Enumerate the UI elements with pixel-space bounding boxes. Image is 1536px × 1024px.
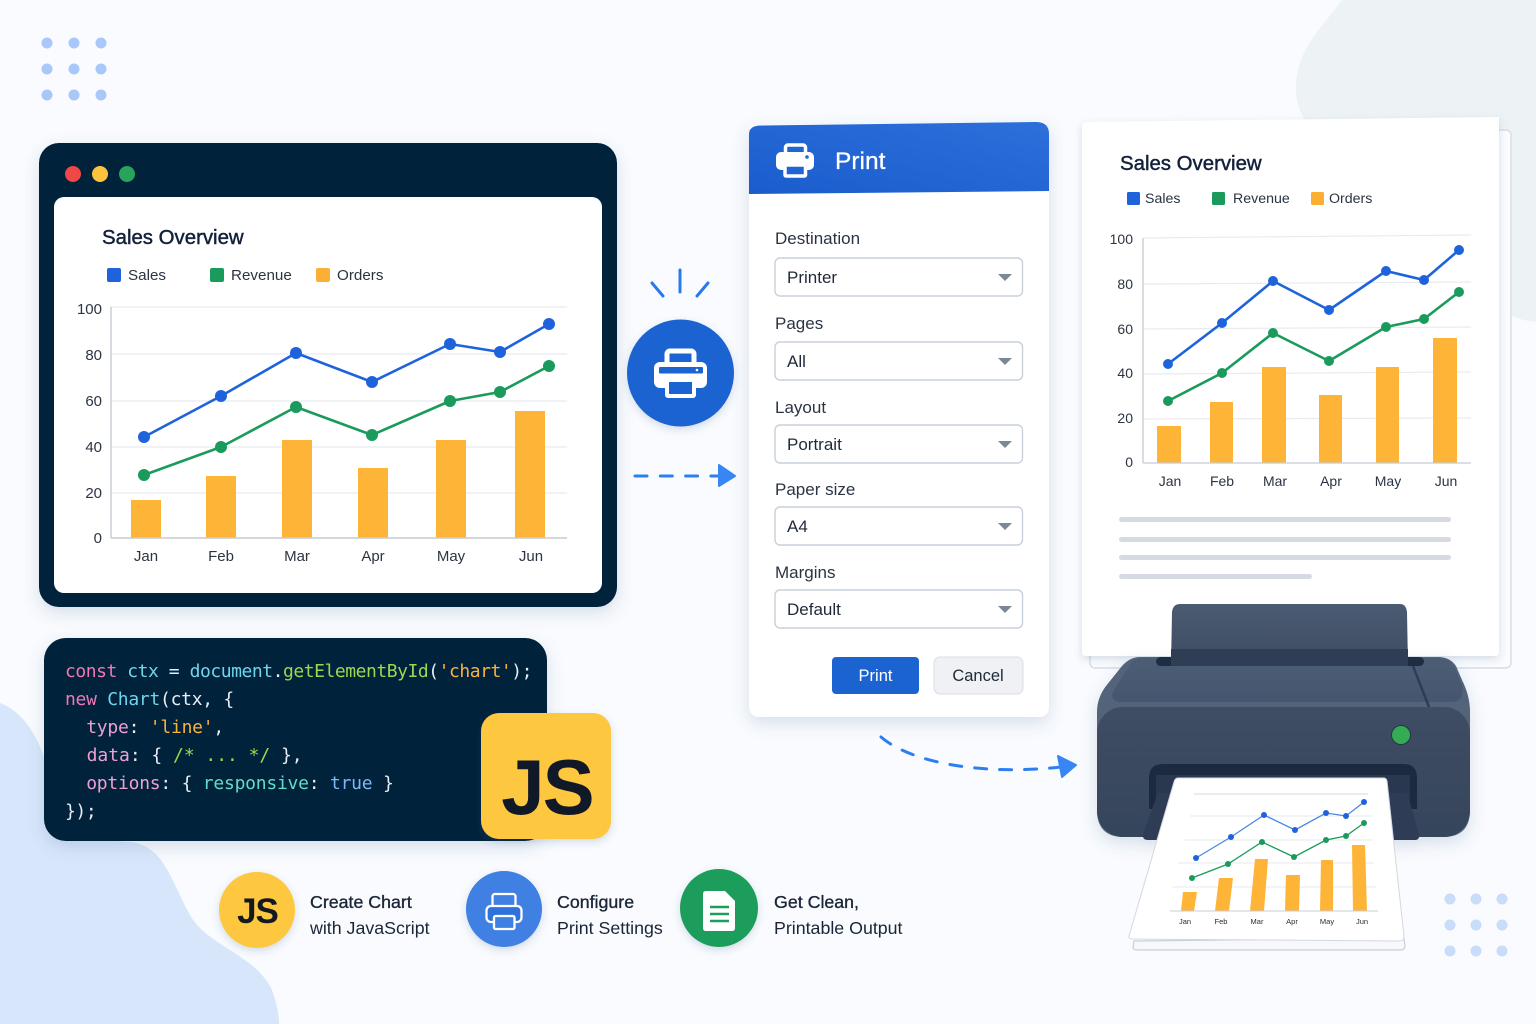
- lower panel: [1097, 707, 1470, 837]
- chart legend: Revenue: [231, 267, 292, 284]
- field: destination: [775, 229, 1022, 296]
- button: cancel: [934, 657, 1023, 694]
- step text: Create Chart: [310, 892, 412, 912]
- field: paper size: A4: [787, 517, 808, 536]
- printed chart: 100: [1110, 231, 1133, 247]
- field: margins: Margins: [775, 563, 835, 582]
- dialog title: Print: [835, 148, 886, 175]
- line and bar chart: [77, 301, 567, 565]
- icon: printer badge: [627, 320, 734, 426]
- button: print: Print: [859, 667, 893, 685]
- printed chart: 40: [1117, 365, 1133, 381]
- illustration: printer: [1097, 604, 1470, 950]
- chart card: [54, 197, 602, 593]
- printed sheet: May: [1320, 917, 1334, 926]
- printed sheet: Apr: [1286, 917, 1298, 926]
- chart legend: Sales: [128, 267, 166, 284]
- arrow: to dialog: [635, 465, 735, 486]
- printed sheet: [1129, 778, 1405, 950]
- dialog header: [749, 122, 1049, 194]
- paper slot: [1149, 764, 1417, 809]
- field: margins: [775, 563, 1022, 628]
- step text: Printable Output: [774, 918, 903, 938]
- field: pages: Pages: [775, 314, 823, 333]
- printed chart: Apr: [1320, 473, 1342, 489]
- blob: top right: [1296, 0, 1536, 322]
- field: pages: [775, 314, 1022, 380]
- printed chart: 20: [1117, 410, 1133, 426]
- step text: with JavaScript: [309, 918, 430, 938]
- field: layout: [775, 398, 1022, 463]
- line and bar chart: Jan: [134, 548, 158, 565]
- field: layout: Portrait: [787, 435, 842, 454]
- printer body: [1097, 657, 1470, 840]
- line and bar chart: 20: [85, 485, 102, 502]
- line and bar chart: 80: [85, 347, 102, 364]
- printed chart: 60: [1117, 321, 1133, 337]
- printed title: Sales Overview: [1120, 153, 1262, 175]
- dots: top left: [42, 38, 106, 100]
- dots: bottom right: [1444, 894, 1508, 956]
- line and bar chart: 0: [94, 530, 102, 547]
- printed legend: [1127, 191, 1372, 207]
- status light: [1392, 726, 1410, 744]
- printed sheet: Jun: [1356, 917, 1368, 926]
- button: cancel: Cancel: [952, 667, 1004, 685]
- panel: printed page stack: [1082, 117, 1511, 668]
- step: output: [680, 869, 903, 947]
- panel: print dialog: [749, 122, 1049, 717]
- printed chart: 80: [1117, 276, 1133, 292]
- chart title: Sales Overview: [102, 227, 244, 249]
- field: pages: All: [787, 352, 806, 371]
- line and bar chart: Jun: [519, 548, 543, 565]
- panel: code snippet: const ctx = document.getElementById('chart');: [65, 661, 532, 682]
- icon: document circle: [680, 869, 758, 947]
- field: paper size: [775, 480, 1022, 545]
- printed sheet: Jan: [1179, 917, 1191, 926]
- step: configure: [466, 871, 663, 947]
- icon: printer circle: [466, 871, 542, 947]
- printed legend: Sales: [1145, 191, 1180, 207]
- output tray: [1143, 793, 1419, 840]
- line and bar chart: 40: [85, 439, 102, 456]
- printed chart: Jun: [1435, 473, 1457, 489]
- printer paper tray: [1156, 604, 1424, 666]
- line and bar chart: May: [437, 548, 466, 565]
- printed chart: Feb: [1210, 473, 1234, 489]
- panel: code snippet: type: 'line',: [65, 717, 224, 738]
- blob: bottom left: [0, 703, 279, 1024]
- field: destination: Printer: [787, 268, 837, 287]
- field: paper size: Paper size: [775, 480, 855, 499]
- panel: code snippet: });: [65, 801, 96, 822]
- window controls: [65, 166, 135, 182]
- step: create chart: [219, 872, 430, 948]
- step text: Configure: [557, 892, 634, 912]
- line and bar chart: Feb: [208, 548, 234, 565]
- panel: code snippet: [44, 638, 547, 841]
- printed legend: Revenue: [1233, 191, 1290, 207]
- printed legend: Orders: [1329, 191, 1372, 207]
- printed chart: May: [1375, 473, 1401, 489]
- printed chart: 0: [1125, 454, 1133, 470]
- icon: JS circle: [219, 872, 295, 948]
- printed chart: Mar: [1263, 473, 1287, 489]
- field: layout: Layout: [775, 398, 826, 417]
- placeholder text lines: [1119, 517, 1451, 579]
- field: destination: Destination: [775, 229, 860, 248]
- chart legend: [107, 267, 384, 284]
- chart legend: Orders: [337, 267, 384, 284]
- line and bar chart: Apr: [361, 548, 385, 565]
- icon: JS badge: JS: [501, 743, 593, 831]
- line and bar chart: Mar: [284, 548, 310, 565]
- upper panel: [1112, 658, 1463, 702]
- panel: code snippet: new Chart(ctx, {: [65, 689, 234, 710]
- step text: Print Settings: [557, 918, 663, 938]
- icon: print sparks: [652, 270, 708, 296]
- step text: Get Clean,: [774, 892, 859, 912]
- printed sheet: Feb: [1215, 917, 1227, 926]
- printed sheet: Mar: [1251, 917, 1264, 926]
- icon: JS circle: JS: [237, 892, 278, 931]
- panel: code snippet: data: { /* ... */ },: [65, 745, 303, 766]
- icon: header printer: [776, 145, 814, 176]
- line and bar chart: 100: [77, 301, 102, 318]
- icon: JS badge: [481, 713, 611, 839]
- panel: code snippet: options: { responsive: true }: [65, 773, 394, 794]
- printed chart: Jan: [1159, 473, 1181, 489]
- line and bar chart: 60: [85, 393, 102, 410]
- button: print: [832, 657, 919, 694]
- printed chart: [1110, 231, 1471, 489]
- field: margins: Default: [787, 600, 841, 619]
- body silhouette: [1097, 657, 1470, 837]
- panel: browser window: [39, 143, 617, 607]
- arrow: to printer: [881, 737, 1076, 777]
